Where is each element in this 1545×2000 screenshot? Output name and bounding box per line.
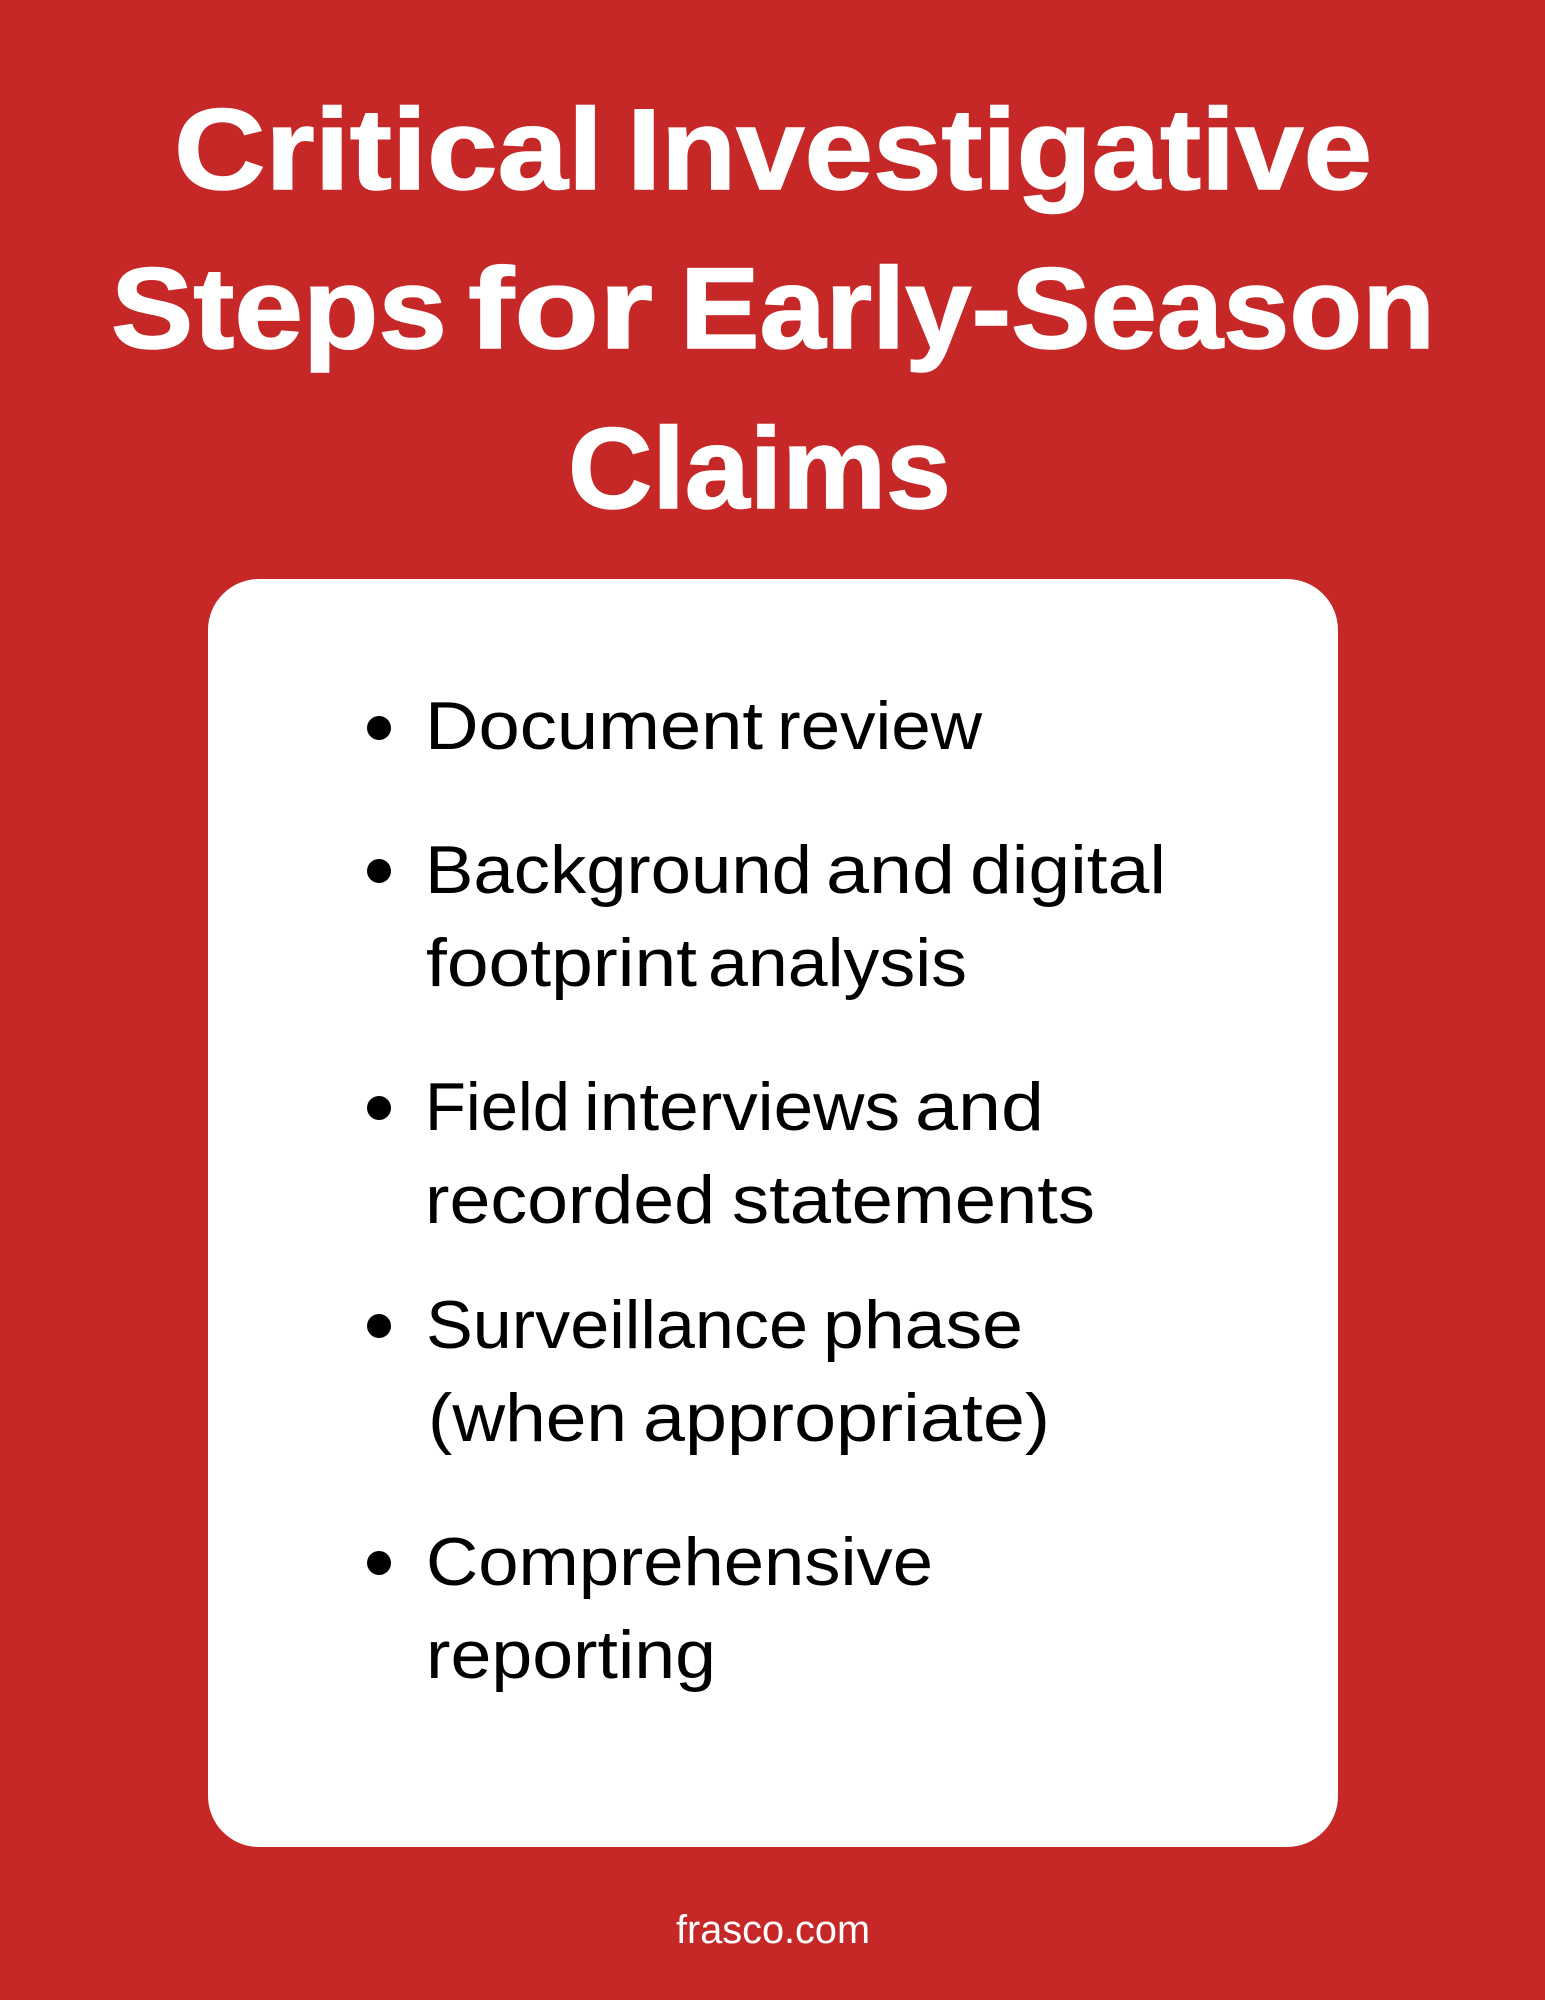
title line 3: Claims [568,405,951,533]
item text: and [915,1069,1044,1145]
item text: and [826,832,955,908]
white rounded card [208,579,1338,1847]
item text line 2 [426,925,967,1001]
list item: field interviews and recorded statements [367,1069,1095,1238]
title line 2: Early-Season [680,245,1435,373]
item text line 2 [428,1380,1050,1456]
item text: interviews [584,1069,900,1145]
bullet [367,1096,391,1120]
item text: Surveillance [426,1287,808,1363]
item text: Comprehensive [426,1524,933,1600]
list item: document review [367,688,983,764]
item text [425,688,983,764]
title line 2 [111,245,1435,373]
title line 2: for [468,245,653,373]
item text line 2: analysis [708,925,967,1001]
bullet [367,1551,391,1575]
item text [425,832,1166,908]
item text: phase [823,1287,1023,1363]
item text: Field [425,1069,570,1145]
item text line 2: reporting [426,1617,716,1693]
item text line 2: statements [732,1162,1095,1238]
item text line 2: recorded [425,1162,715,1238]
list item: background and digital footprint analysis [367,832,1166,1001]
item text: digital [970,832,1166,908]
item text: review [777,688,983,764]
bullet [367,859,391,883]
item text: Background [425,832,812,908]
list item: comprehensive reporting [367,1524,933,1693]
title line 1: Investigative [627,86,1372,214]
title line 2: Steps [111,245,447,373]
list item: surveillance phase when appropriate [367,1287,1050,1456]
item text [426,1287,1023,1363]
title line 1 [174,86,1372,214]
bullet [367,716,391,740]
panel: investigative steps list [208,579,1338,1847]
title line 1: Critical [174,86,603,214]
bullet [367,1314,391,1338]
item text: Document [425,688,763,764]
item text line 2: footprint [426,925,697,1001]
item text line 2: appropriate) [643,1380,1050,1456]
item text line 2 [425,1162,1095,1238]
footer: website: frasco.com [676,1908,870,1952]
item text [425,1069,1044,1145]
item text line 2: (when [428,1380,627,1456]
title [111,86,1435,533]
